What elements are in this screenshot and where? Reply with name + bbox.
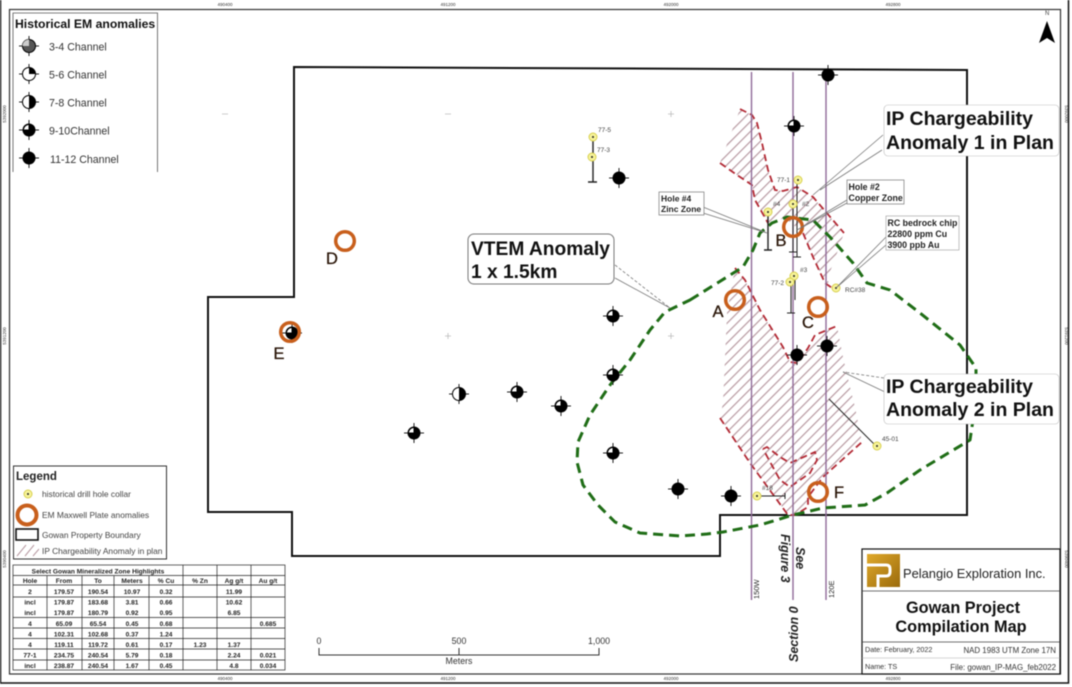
table: mineralized zone highlights: 0.45	[160, 663, 173, 670]
EM Maxwell plate anomalies	[281, 218, 827, 501]
IP anomaly 1 hatch	[720, 109, 844, 290]
table: mineralized zone highlights: 5.79	[126, 652, 139, 660]
section labels: Figure 3	[778, 534, 792, 583]
table: mineralized zone highlights	[13, 565, 285, 670]
callout: RC bedrock chip: 22800 ppm Cu	[888, 229, 947, 239]
scale bar: Meters	[446, 656, 473, 666]
anomaly letters: A	[712, 303, 724, 321]
legend panel: historical drill hole collar	[42, 489, 131, 499]
table: mineralized zone highlights: 119.72	[88, 642, 108, 649]
table: mineralized zone highlights: 180.79	[88, 610, 108, 617]
legend panel: IP Chargeability Anomaly in plan	[42, 546, 163, 556]
grid coordinate labels: 492800	[885, 676, 901, 681]
drill hole labels: 77-2	[771, 280, 784, 287]
table: mineralized zone highlights: 0.45	[126, 621, 139, 628]
table: mineralized zone highlights: 10.62	[226, 600, 243, 606]
table: mineralized zone highlights: 4	[28, 642, 32, 649]
title block: Pelangio Exploration Inc.	[903, 566, 1046, 581]
table: mineralized zone highlights: 0.021	[260, 652, 277, 660]
section labels: See	[793, 547, 807, 569]
table: mineralized zone highlights: 183.68	[88, 600, 108, 606]
title block: NAD 1983 UTM Zone 17N	[963, 646, 1056, 655]
table: mineralized zone highlights: 238.87	[54, 663, 74, 670]
title block: Name: TS	[865, 662, 897, 671]
callout: IP anomaly 1: Anomaly 1 in Plan	[886, 132, 1054, 154]
table: mineralized zone highlights: incl	[24, 663, 36, 670]
grid coordinate labels: 5392000	[2, 105, 7, 123]
callout: VTEM anomaly: VTEM Anomaly	[471, 239, 610, 260]
title block: Date: February, 2022	[865, 645, 932, 654]
table: mineralized zone highlights: 65.54	[90, 621, 107, 628]
legend: historical EM anomalies: 5-6 Channel	[49, 70, 107, 82]
grid coordinate labels: 5390400	[1064, 550, 1069, 568]
title block	[862, 549, 1060, 674]
table: mineralized zone highlights: 179.87	[54, 610, 74, 617]
legend panel: EM Maxwell Plate anomalies	[42, 510, 149, 520]
north arrow	[1039, 11, 1055, 43]
drill hole labels: #2	[802, 201, 810, 208]
table: mineralized zone highlights: 240.54	[88, 663, 108, 670]
section labels	[752, 534, 836, 662]
table: mineralized zone highlights: 11.99	[226, 589, 242, 596]
callout: IP anomaly 1: IP Chargeability	[886, 108, 1033, 130]
table: mineralized zone highlights: % Zn	[192, 578, 208, 585]
table: mineralized zone highlights: 4	[28, 621, 32, 628]
callout: hole 4: Hole #4	[661, 194, 692, 204]
legend: historical EM anomalies: 7-8 Channel	[49, 98, 107, 110]
table: mineralized zone highlights: 1.23	[194, 642, 207, 649]
drill hole labels: 77-1	[777, 177, 790, 184]
anomaly letters: C	[802, 314, 814, 332]
grid coordinate labels: 491200	[440, 2, 456, 7]
table: mineralized zone highlights: Meters	[121, 578, 143, 585]
legend: historical EM anomalies: 3-4 Channel	[49, 42, 107, 54]
grid coordinate labels: 5390400	[2, 550, 7, 568]
grid coordinate labels: 490400	[217, 2, 233, 7]
drill hole labels: #4	[773, 201, 781, 208]
table: mineralized zone highlights: 0.92	[126, 610, 139, 617]
table: mineralized zone highlights: 6.85	[228, 610, 241, 617]
callout: IP anomaly 2	[884, 374, 1059, 424]
drill hole traces	[588, 137, 876, 499]
callout: IP anomaly 2: IP Chargeability	[886, 376, 1033, 398]
drill hole labels: #18	[762, 485, 773, 492]
title block: Compilation Map	[895, 618, 1027, 636]
grid coordinate labels: 492000	[663, 676, 679, 681]
grid coordinate labels: 5392000	[1064, 105, 1069, 123]
EM anomaly symbols	[282, 65, 838, 506]
legend panel: Gowan Property Boundary	[42, 530, 142, 540]
VTEM green dashed outline	[577, 217, 976, 536]
table: mineralized zone highlights: 0.61	[126, 642, 139, 649]
grid coordinate labels: 491200	[440, 676, 456, 681]
table: mineralized zone highlights: 1.37	[228, 642, 241, 649]
table: mineralized zone highlights: 0.034	[260, 663, 277, 670]
table: mineralized zone highlights: Au g/t	[259, 578, 278, 585]
legend: historical EM anomalies	[13, 13, 158, 172]
callout: hole 4	[659, 192, 704, 215]
table: mineralized zone highlights: 0.18	[160, 652, 173, 660]
table: mineralized zone highlights: 1.24	[160, 632, 173, 638]
table: mineralized zone highlights: 179.57	[54, 589, 74, 596]
table: mineralized zone highlights: 119.11	[54, 642, 74, 649]
callout: hole 2: Copper Zone	[848, 193, 903, 203]
scale bar: 1,000	[588, 636, 610, 646]
legend: historical EM anomalies: 11-12 Channel	[50, 154, 119, 166]
callout: VTEM anomaly: 1 x 1.5km	[471, 262, 557, 283]
drill hole labels: #3	[800, 267, 808, 274]
table: mineralized zone highlights: 1.67	[126, 663, 139, 670]
grid coordinate labels: 5391200	[1064, 327, 1069, 345]
section labels: 120E	[827, 580, 836, 598]
table: mineralized zone highlights: 0.17	[160, 642, 173, 649]
grid coordinate labels: 492800	[885, 2, 901, 7]
callout: RC bedrock chip: 3900 ppb Au	[888, 240, 939, 250]
table: mineralized zone highlights: 0.37	[126, 632, 139, 638]
legend panel: Legend	[16, 471, 57, 483]
table: mineralized zone highlights: incl	[24, 610, 36, 617]
table: mineralized zone highlights: 4	[28, 632, 32, 638]
table: mineralized zone highlights: 65.09	[56, 621, 73, 628]
logo	[867, 554, 900, 587]
table: mineralized zone highlights: 77-1	[23, 652, 37, 660]
legend: historical EM anomalies: Historical EM anomalies	[15, 17, 155, 31]
callout: hole 2: Hole #2	[848, 182, 880, 192]
table: mineralized zone highlights: 0.68	[160, 621, 173, 628]
table: mineralized zone highlights: 179.87	[54, 600, 74, 606]
callout: hole 2	[847, 180, 904, 204]
table: mineralized zone highlights: 10.97	[124, 589, 141, 596]
table: mineralized zone highlights: 102.31	[54, 632, 74, 638]
table: mineralized zone highlights: 102.68	[88, 632, 108, 638]
table: mineralized zone highlights: 2	[28, 589, 32, 596]
table: mineralized zone highlights: 240.54	[88, 652, 108, 660]
property boundary	[208, 67, 967, 556]
anomaly letters: D	[326, 250, 338, 268]
table: mineralized zone highlights: incl	[24, 600, 36, 606]
scale bar: 500	[452, 636, 466, 646]
section labels: Section 0	[787, 606, 801, 662]
grid coordinate labels: 492000	[663, 2, 679, 7]
table: mineralized zone highlights: 0.32	[160, 589, 173, 596]
table: mineralized zone highlights: 2.24	[228, 652, 241, 660]
table: mineralized zone highlights: Ag g/t	[225, 578, 244, 585]
scale bar	[317, 636, 610, 666]
legend: historical EM anomalies: 9-10Channel	[49, 126, 110, 138]
drill hole labels: RC#38	[845, 287, 866, 294]
anomaly letters	[273, 232, 844, 502]
grid coordinate labels: 5391200	[2, 327, 7, 345]
grid coordinate labels: 490400	[217, 676, 233, 681]
anomaly letters: E	[273, 345, 285, 363]
callout: IP anomaly 1	[884, 105, 1059, 156]
drill hole labels	[597, 127, 899, 492]
drill hole labels: 77-5	[598, 127, 611, 134]
table: mineralized zone highlights: Select Gowan Mineralized Zone Highlights	[32, 568, 165, 576]
IP anomaly 2 hatch	[720, 268, 862, 515]
table: mineralized zone highlights: % Cu	[158, 578, 174, 585]
callout: hole 4: Zinc Zone	[661, 204, 701, 214]
title block: Gowan Project	[906, 599, 1021, 617]
table: mineralized zone highlights: From	[56, 578, 72, 585]
north arrow: N	[1045, 11, 1049, 17]
anomaly letters: F	[834, 484, 844, 502]
table: mineralized zone highlights: 0.685	[260, 621, 277, 628]
title block: File: gowan_IP-MAG_feb2022	[950, 663, 1056, 672]
table: mineralized zone highlights: 0.95	[160, 610, 173, 617]
legend panel	[14, 466, 166, 559]
table: mineralized zone highlights: 190.54	[88, 589, 108, 596]
table: mineralized zone highlights: Hole	[23, 578, 37, 585]
table: mineralized zone highlights: To	[94, 578, 102, 585]
table: mineralized zone highlights: 4.8	[229, 663, 239, 670]
table: mineralized zone highlights: 234.75	[54, 652, 74, 660]
drill hole labels: 45-01	[882, 436, 899, 443]
grid tick crosses	[222, 111, 674, 339]
callout: VTEM anomaly	[468, 234, 614, 284]
callout: RC bedrock chip: RC bedrock chip	[888, 218, 958, 228]
drill hole collars	[588, 133, 881, 500]
section lines	[752, 72, 826, 600]
callout: IP anomaly 2: Anomaly 2 in Plan	[886, 399, 1054, 421]
anomaly letters: B	[775, 232, 787, 250]
callout leaders	[615, 135, 886, 392]
table: mineralized zone highlights: 3.81	[126, 600, 139, 606]
table: mineralized zone highlights: 0.66	[160, 600, 173, 606]
drill hole labels: 77-3	[597, 147, 610, 154]
scale bar: 0	[317, 636, 322, 646]
callout: RC bedrock chip	[886, 216, 959, 250]
section labels: 150W	[752, 578, 761, 599]
